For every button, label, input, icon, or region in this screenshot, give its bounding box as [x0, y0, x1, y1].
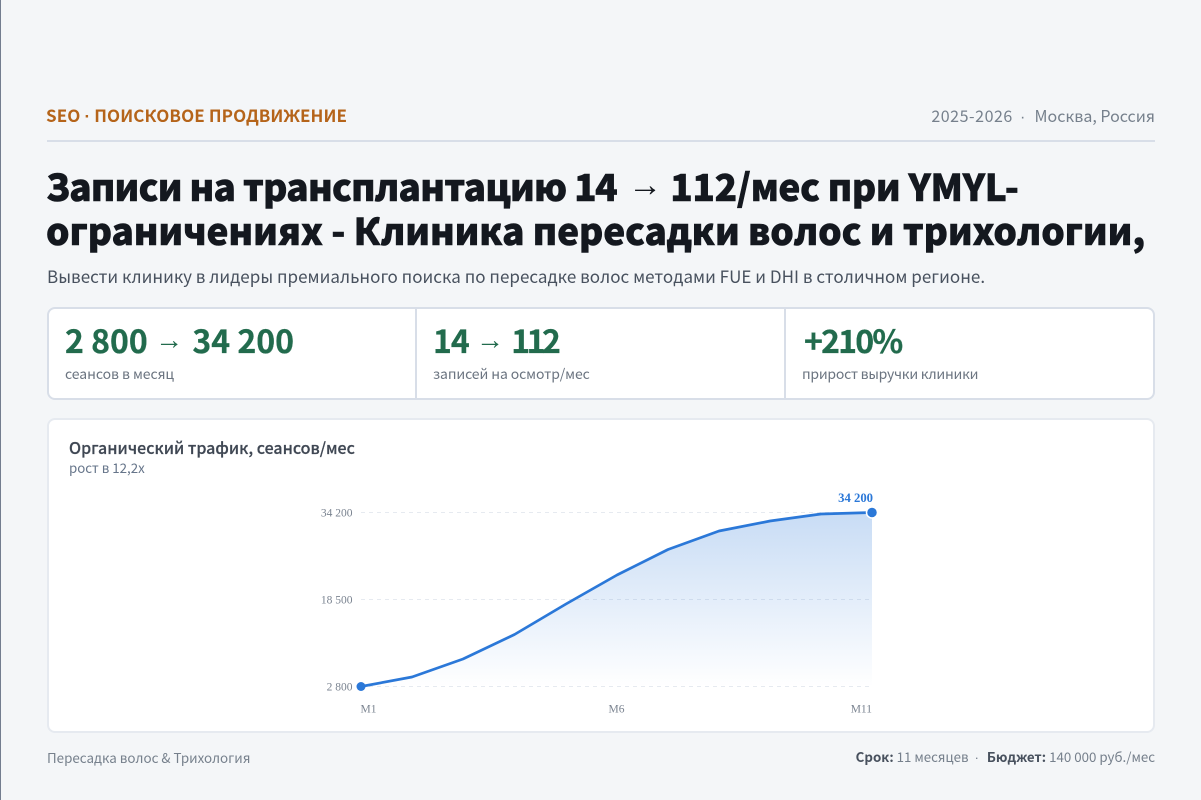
- area line chart: 18 500: [321, 594, 353, 606]
- area line chart: M1: [360, 704, 377, 716]
- metric label: sessions: сеансов в месяц: [65, 364, 174, 384]
- panel: chart card: [47, 418, 1155, 733]
- subtitle: Вывести клинику в лидеры премиального поиска по пересадке волос методами FUE и DHI в столичном регионе.: [47, 263, 985, 288]
- left edge line: [0, 0, 1, 800]
- footer left: Пересадка волос & Трихология: [47, 747, 250, 767]
- chart title: Органический трафик, сеансов/мес: [69, 435, 355, 459]
- eyebrow label: SEO · ПОИСКОВОЕ ПРОДВИЖЕНИЕ: [46, 102, 347, 127]
- area line chart: 34 200: [321, 508, 353, 520]
- chart subtitle: рост в 12,2x: [69, 458, 145, 477]
- metric: sessions: 2 800 → 34 200: [65, 317, 294, 363]
- metric: revenue: +210%: [804, 317, 901, 363]
- metric divider 2: [784, 309, 786, 398]
- metric label: bookings: записей на осмотр/мес: [433, 364, 590, 384]
- footer right: Срок: 11 месяцев · Бюджет: 140 000 руб./мес: [856, 747, 1155, 766]
- metric divider 1: [415, 309, 417, 398]
- panel: key metrics: [47, 307, 1155, 400]
- period and location: 2025-2026 · Москва, Россия: [931, 103, 1155, 127]
- metric: bookings: 14 → 112: [433, 317, 557, 363]
- header divider: [47, 140, 1155, 142]
- area line chart: 2 800: [327, 682, 353, 694]
- area line chart: M6: [608, 704, 625, 716]
- area line chart: M11: [851, 704, 872, 716]
- metric label: revenue: прирост выручки клиники: [802, 364, 978, 384]
- title: [46, 158, 1145, 256]
- area line chart: 34 200: [838, 491, 873, 505]
- title: Записи на трансплантацию 14 → 112/мес при YMYL-: [46, 158, 1019, 212]
- title: ограничениях - Клиника пересадки волос и трихологии,: [46, 202, 1145, 256]
